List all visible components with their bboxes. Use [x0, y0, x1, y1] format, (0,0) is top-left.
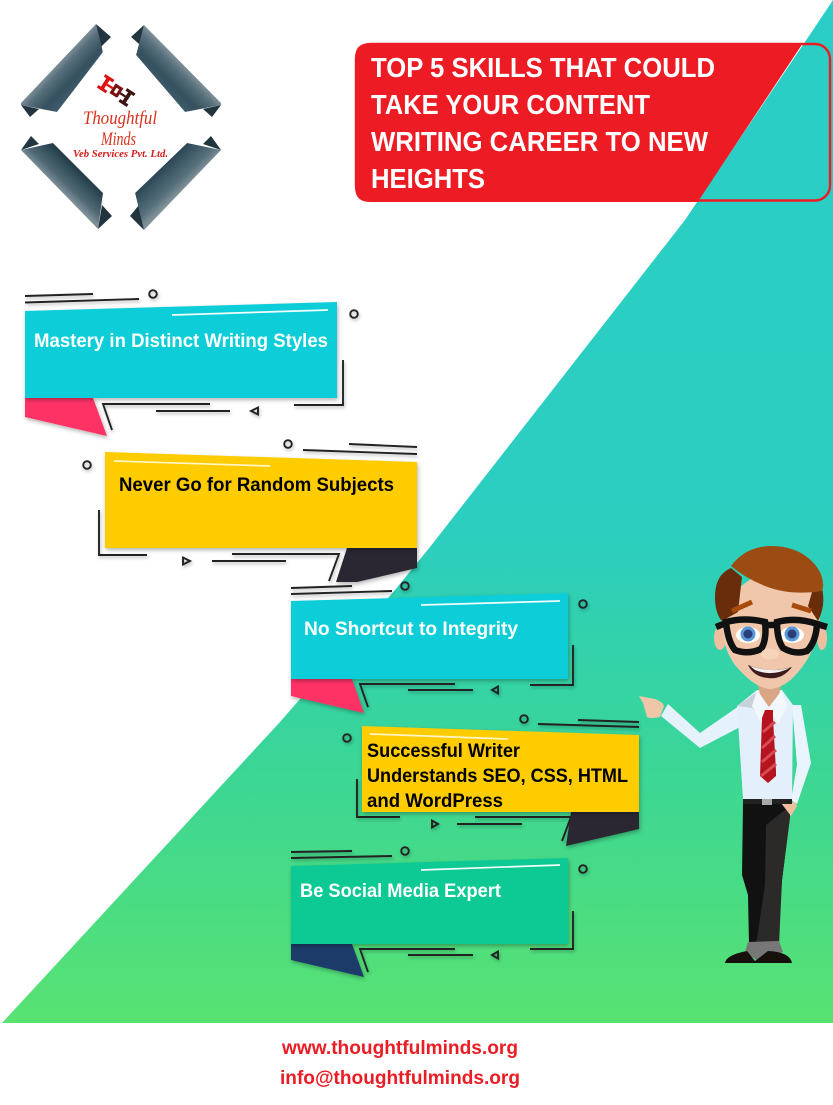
banner: title text: TAKE YOUR CONTENT [371, 89, 650, 120]
card 2: ribbon [336, 548, 417, 582]
logo: top-left ribbon [21, 24, 103, 112]
card 4: text: Successful Writer [367, 740, 520, 762]
card 1: text: Mastery in Distinct Writing Styles [34, 330, 328, 352]
card 5: highlight [421, 865, 560, 870]
card 4: ribbon [566, 812, 639, 846]
banner: red fill [355, 43, 803, 202]
character: teeth [750, 666, 790, 673]
card 2: text: Never Go for Random Subjects [119, 474, 394, 496]
card 3: decorations [291, 582, 587, 707]
character: back hair [715, 568, 742, 621]
character: ear right [817, 626, 827, 650]
card 1: ribbon [25, 398, 107, 436]
card 5: text: Be Social Media Expert [300, 880, 501, 902]
skill card 4 [343, 715, 639, 846]
card 4: panel [362, 726, 639, 812]
logo: back folds [21, 24, 221, 230]
character: right trouser leg [756, 806, 790, 945]
character: nose [761, 648, 779, 660]
character: trousers [742, 803, 790, 945]
banner: red outline [356, 44, 830, 200]
logo: top-right ribbon [136, 25, 221, 112]
character: hand in pocket [781, 802, 797, 816]
card 3: ribbon [291, 679, 364, 713]
character: pointing hand [639, 696, 664, 718]
banner: title text: TOP 5 SKILLS THAT COULD [371, 52, 715, 83]
logo: white diamond [24, 28, 218, 222]
character: buckle [762, 799, 772, 805]
character: right arm [791, 705, 811, 804]
character: collar [752, 690, 787, 724]
logo: minds: Minds [100, 129, 136, 150]
skill card 2 [83, 440, 417, 582]
card 4: text: and WordPress [367, 790, 503, 812]
character: shoes [725, 951, 792, 963]
logo: bottom-right ribbon [135, 143, 221, 230]
card 2: decorations [83, 440, 417, 581]
card 3: panel [291, 593, 568, 679]
logo: bottom-left ribbon [21, 143, 103, 229]
card 1: decorations [25, 290, 358, 430]
card 3: highlight [421, 601, 560, 605]
character: glasses [716, 620, 827, 652]
card 1: highlight [172, 310, 328, 315]
character: left arm [661, 704, 742, 748]
title banner [355, 43, 830, 202]
character: tie [760, 710, 776, 783]
card 2: highlight [114, 461, 270, 466]
skill card 5 [291, 847, 587, 977]
character: tie stripes [761, 722, 776, 776]
card 4: highlight [370, 734, 508, 739]
card 5: ribbon [291, 944, 364, 977]
character: eyes [736, 626, 804, 643]
character: neck [757, 680, 782, 707]
banner: title text [371, 52, 715, 194]
character: ear left [714, 626, 726, 650]
card 5: decorations [291, 847, 587, 972]
character: mouth [748, 665, 792, 678]
character: face [721, 565, 820, 689]
logo [21, 24, 221, 230]
logo: company name: Thoughtful [83, 108, 157, 129]
banner: title text: HEIGHTS [371, 163, 485, 194]
card 5: panel [291, 858, 568, 944]
logo: tagline: Veb Services Pvt. Ltd. [73, 149, 168, 160]
character: shoulder shade [737, 692, 762, 719]
footer email: info@thoughtfulminds.org [280, 1068, 520, 1089]
card 3: text: No Shortcut to Integrity [304, 618, 518, 640]
card 4: text: Understands SEO, CSS, HTML [367, 765, 628, 787]
character: side hair [808, 588, 823, 621]
logo: icon [97, 74, 135, 107]
character: cuffs [745, 941, 783, 961]
card 4: decorations [343, 715, 639, 841]
character: belt [743, 799, 792, 804]
character: pointing man [639, 546, 827, 963]
footer website: www.thoughtfulminds.org [281, 1038, 518, 1059]
card 4: text [367, 740, 628, 812]
banner: title text: WRITING CAREER TO NEW [371, 126, 708, 157]
skill card 1 [25, 290, 358, 436]
character: eyebrows [732, 602, 811, 611]
skill card 3 [291, 582, 587, 713]
card 1: panel [25, 302, 337, 398]
character: torso [737, 690, 793, 799]
card 2: panel [105, 452, 417, 548]
character: top hair [731, 546, 823, 593]
